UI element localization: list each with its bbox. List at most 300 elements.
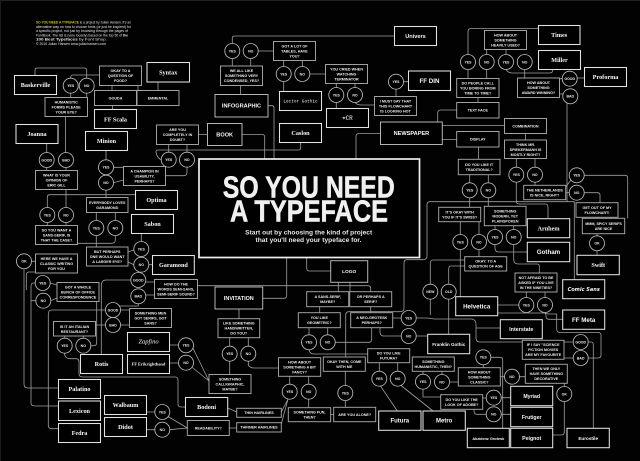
- decision circles: YES: [333, 93, 340, 97]
- typeface: Garamond: Garamond: [159, 262, 188, 269]
- question: spicy serifs: MMM, SPICY SERIFS: [585, 222, 622, 226]
- question: think mr spiekermann: SPIEKERMANN IS: [510, 148, 542, 152]
- decision circles: YES: [376, 377, 383, 381]
- typeface: FF DIN: [408, 71, 450, 90]
- typeface: Proforma: [584, 68, 626, 86]
- question: get out of my flowchart: FLOWCHART!: [584, 211, 610, 215]
- question: a question of age: OKAY: TO A: [475, 260, 496, 264]
- decision circles: NO: [395, 377, 401, 381]
- question: okay to a question of food: OKAY TO A: [111, 69, 131, 73]
- question: spicy serifs: ARE NICE: [595, 227, 613, 231]
- typeface: Palatino: [58, 380, 100, 398]
- typeface: FF Meta: FF Meta: [572, 317, 596, 324]
- decision circles: NO: [522, 60, 528, 64]
- option: thinner hairlines: [237, 423, 281, 432]
- question: go people call you boring: TIME TO TIME?: [464, 91, 492, 95]
- question: a bit fancy: [278, 358, 321, 376]
- question: decorative: THEN WE ONLY: [532, 367, 561, 371]
- category: logo: LOGO: [342, 269, 357, 275]
- main heading: SO YOU NEED: [223, 171, 395, 204]
- question: we all like condensed: SOMETHING VERY: [225, 74, 259, 78]
- decision circles: YES: [159, 410, 166, 414]
- subtitle second line: that you'll need your typeface for.: [256, 237, 362, 244]
- typeface: Univers: [394, 26, 436, 46]
- decision circles: YES: [573, 174, 581, 178]
- question: okay then come with me: WITH ME: [336, 365, 353, 369]
- category: newspaper: [380, 122, 442, 144]
- question: humanistic forms: YOUR EYE?: [56, 110, 78, 114]
- question: a question of age: [465, 257, 507, 271]
- typeface: Fedra: [58, 424, 100, 442]
- question: office correspondence: CORRESPONDENCE: [60, 295, 97, 299]
- question: not afraid: NOT AFRAID TO BE: [519, 276, 554, 280]
- typeface: Joanna: Joanna: [27, 131, 47, 138]
- category: infographic: [215, 94, 268, 117]
- typeface: Metro: [423, 411, 465, 430]
- question: neo-grotesk: PERHAPS?: [362, 321, 382, 325]
- decision circles: GOOD: [575, 340, 587, 344]
- typeface: Optima: [136, 190, 178, 210]
- typeface: Times: [538, 26, 580, 44]
- typeface: Interstate: Interstate: [509, 327, 533, 333]
- question: not afraid: IN THE NINETIES?: [520, 286, 553, 290]
- decision circles: YES: [44, 213, 51, 217]
- typeface: Metro: Metro: [436, 419, 453, 425]
- option: gouda: GOUDA: [109, 96, 123, 100]
- typeface: Myriad: Myriad: [523, 394, 540, 400]
- typeface: Optima: Optima: [146, 197, 167, 204]
- question: okay to a question of food: QUESTION OF: [108, 74, 134, 78]
- typeface: Sabon: Sabon: [144, 221, 161, 228]
- decision circles: NO: [160, 428, 165, 432]
- typeface: FF DIN: FF DIN: [420, 78, 440, 85]
- question: adobe: LOOK OF ADOBE?: [445, 403, 479, 407]
- question: handwritten: DO YOU?: [230, 332, 248, 336]
- typeface: Comic Sans: Comic Sans: [568, 287, 600, 293]
- question: go people call you boring: [457, 78, 499, 98]
- option: or perhaps a serif: OR PERHAPS A: [357, 295, 385, 299]
- question: a bit fancy: FANCY?: [292, 370, 308, 374]
- question: think mr spiekermann: MOSTLY RIGHT?: [511, 153, 541, 157]
- decision circles: NO: [486, 189, 491, 193]
- question: men got serifs: SANS?: [144, 321, 157, 325]
- question: neo-grotesk: [351, 313, 393, 328]
- typeface: Eurostile: [567, 428, 609, 448]
- decision circles: YES: [490, 396, 498, 400]
- option: display: [457, 132, 499, 147]
- decision circles: NO: [81, 344, 86, 348]
- question: office correspondence: BUNCH OF OFFICE: [61, 290, 96, 294]
- option: combination: COMBINATION: [512, 124, 539, 128]
- decision circles: YES: [305, 341, 313, 345]
- question: larger eye: ONE WOULD WANT: [90, 255, 125, 259]
- category: newspaper: NEWSPAPER: [394, 131, 429, 137]
- question: you cried terminator: [326, 64, 368, 84]
- decision circles: GOOD: [41, 158, 53, 162]
- question: netherlands: [524, 185, 566, 200]
- question: something classic: SOMETHING: [468, 375, 491, 379]
- typeface: OCR: ⌖CR: [342, 115, 353, 122]
- question: traditional: [458, 159, 500, 175]
- decision circles: NO: [542, 303, 548, 307]
- decision circles: BAD: [567, 95, 575, 99]
- decision circles: OK: [21, 260, 27, 264]
- question: office correspondence: GOT A WHOLE: [65, 285, 92, 289]
- decision circles: BAD: [62, 158, 70, 162]
- question: science fiction: FICTION MOVIES: [528, 348, 559, 352]
- typeface: FF Scala: [94, 110, 136, 128]
- question: humanistic forms: [45, 98, 88, 116]
- decision circles: BAD: [577, 356, 585, 360]
- typeface: FF Erikrighthand: FF Erikrighthand: [132, 362, 166, 366]
- question: do you like futura: [368, 349, 410, 363]
- question: heavily used: [484, 30, 526, 50]
- question: go people call you boring: DO PEOPLE CALL: [462, 81, 495, 85]
- typeface: Zapfino: Zapfino: [138, 338, 159, 346]
- typeface: Miller: Miller: [551, 57, 568, 64]
- question: decorative: [525, 364, 567, 383]
- typeface: Interstate: [500, 320, 542, 339]
- question: award winning: [518, 78, 560, 98]
- typeface: Rotis: [80, 354, 122, 374]
- question: calligraphic: MAYBE?: [222, 387, 238, 391]
- typeface: Caslon: [280, 124, 322, 142]
- decision circles: GOOD: [564, 77, 576, 81]
- question: go people call you boring: YOU BORING FROM: [460, 86, 496, 90]
- question: okay to a question of food: [100, 66, 142, 86]
- question: something fun: [288, 408, 331, 422]
- decision circles: YES: [67, 84, 75, 88]
- decision circles: YES: [466, 189, 474, 193]
- typeface: Bodoni: Bodoni: [197, 404, 216, 411]
- decision circles: YES: [39, 281, 47, 285]
- question: modern plainspoken: MODERN, YET: [492, 214, 519, 218]
- subtitle: Start out by choosing the kind of project: [245, 230, 373, 237]
- question: do you like futura: FUTURA?: [380, 357, 398, 361]
- typeface: FF Erikrighthand: [128, 354, 170, 374]
- typeface: Futura: Futura: [390, 419, 410, 425]
- question: traditional: TRADITIONAL?: [466, 168, 494, 172]
- question: okay with swiss: YOU IF IT'S SWISS?: [442, 215, 478, 219]
- question: something humanistic: HUMANISTIC, THEN?: [415, 365, 453, 369]
- decision circles: YES: [182, 344, 190, 348]
- category: logo: [331, 261, 368, 282]
- typeface: Bodoni: [186, 398, 228, 416]
- typeface: Helvetica: Helvetica: [463, 303, 491, 310]
- decision circles: NO: [491, 413, 497, 417]
- decision circles: YES: [392, 80, 400, 84]
- typeface: Akzidenz Grotesk: [467, 428, 509, 448]
- decision circles: NO: [41, 299, 46, 303]
- decision circles: YES: [286, 390, 294, 394]
- question: handwritten: LIKE SOMETHING: [223, 322, 255, 326]
- typeface: Frutiger: Frutiger: [522, 415, 542, 421]
- question: italian restaurant: IS IT AN ITALIAN: [60, 325, 89, 329]
- decision circles: NO: [103, 181, 109, 185]
- question: award winning: SOMETHING: [527, 86, 550, 90]
- question: okay with swiss: [439, 207, 481, 222]
- typeface: Caslon: Caslon: [291, 130, 310, 137]
- category: book: BOOK: [216, 132, 233, 138]
- question: netherlands: IS NICE, RIGHT?: [530, 193, 560, 197]
- decision circles: NEW: [426, 290, 435, 294]
- typeface: Arnhem: Arnhem: [538, 226, 560, 232]
- decision circles: YES: [93, 226, 100, 230]
- decision circles: NO: [300, 72, 305, 76]
- decision circles: NO: [532, 173, 538, 177]
- question: geometric: YOU LIKE: [311, 316, 329, 320]
- question: italian restaurant: [54, 322, 96, 336]
- question: larger eye: A LARGER EYE?: [92, 260, 123, 264]
- typeface: Zapfino: [128, 332, 170, 352]
- typeface: Garamond: [152, 256, 194, 274]
- typeface: Didot: Didot: [118, 424, 134, 431]
- question: humanistic forms: HUMANISTIC: [55, 100, 78, 104]
- question: something classic: CLASSIC?: [470, 380, 489, 384]
- typeface: FF Scala: FF Scala: [104, 116, 127, 123]
- question: handwritten: HANDWRITTEN,: [225, 327, 253, 331]
- decision circles: NO: [306, 390, 312, 394]
- question: i must say: I MUST SAY THAT: [380, 99, 412, 103]
- question: okay to a question of food: FOOD?: [114, 79, 128, 83]
- typeface: Minion: Minion: [97, 138, 117, 145]
- decision circles: NO: [325, 341, 331, 345]
- decision circles: NO: [511, 235, 517, 239]
- typeface: FF Meta: [563, 310, 605, 329]
- question: semi-sans: WORDS SEMI-SANS,: [158, 287, 194, 291]
- decision circles: NO: [183, 361, 189, 365]
- typeface: Comic Sans: [563, 280, 605, 299]
- decision circles: NO: [184, 158, 190, 162]
- question: think mr spiekermann: THINK MR.: [516, 143, 535, 147]
- question: something classic: HOW ABOUT: [468, 370, 492, 374]
- question: decorative: DECORATIVE: [534, 377, 559, 381]
- question: modern plainspoken: [484, 206, 526, 226]
- typeface: Lector Gothic: Lector Gothic: [283, 100, 318, 104]
- decision circles: NO: [439, 380, 445, 384]
- question: sans-serif: SO YOU WANT A: [42, 228, 72, 232]
- option: thinner hairlines: THINNER HAIRLINES: [240, 426, 278, 430]
- question: something humanistic: [412, 357, 454, 371]
- typeface: Didot: [104, 418, 146, 436]
- question: got a lot of tables: [274, 42, 316, 60]
- option: a sans-serif: MAYBE?: [320, 300, 336, 304]
- question: adobe: DO YOU LIKE THE: [446, 398, 478, 402]
- decision circles: NO: [509, 375, 515, 379]
- decision circles: OK: [562, 392, 567, 396]
- question: are you completely in doubt: COMPLETELY IN: [163, 133, 193, 137]
- question: classic writing: FOR YOU: [48, 267, 65, 271]
- decision circles: GOOD: [108, 308, 119, 312]
- typeface: Myriad: [511, 386, 553, 406]
- intro text: 100 Best Typefaces by Font Shop.: [36, 38, 107, 42]
- question: what is your opinion of eric gill: OPINION OF: [46, 178, 68, 182]
- question: men got serifs: SOMETHING MEN: [135, 311, 167, 315]
- question: got a lot of tables: GOT A LOT OF: [282, 44, 308, 48]
- typeface: Peignot: [511, 428, 553, 448]
- question: not afraid: [515, 273, 557, 292]
- question: spicy serifs: [582, 218, 625, 234]
- question: we all like condensed: CONDENSED, YES?: [224, 79, 260, 83]
- title panel: [199, 159, 420, 258]
- typeface: Proforma: Proforma: [593, 74, 618, 81]
- option: text face: TEXT FACE: [468, 109, 488, 113]
- question: you cried terminator: YOU CRIED WHEN: [330, 67, 363, 71]
- typeface: Frutiger: [511, 407, 553, 427]
- typeface: Gotham: Gotham: [537, 249, 561, 256]
- question: i must say: [374, 96, 416, 116]
- question: got a lot of tables: TABLES, HAVE: [281, 49, 308, 53]
- option: text face: [457, 102, 499, 118]
- decision circles: GOOD: [133, 278, 144, 282]
- decision circles: YES: [464, 60, 472, 64]
- question: a question of age: QUESTION OF AGE: [469, 265, 503, 269]
- option: thin hairlines: [237, 408, 281, 417]
- question: semi-sans: HOW DO THE: [164, 282, 189, 286]
- category: invitation: [215, 287, 263, 309]
- typeface: Franklin Gothic: Franklin Gothic: [432, 342, 466, 347]
- question: geometric: GEOMETRIC?: [307, 321, 332, 325]
- question: humanistic forms: FORMS PLEASE: [52, 105, 81, 109]
- typeface: Fedra: Fedra: [72, 430, 87, 437]
- question: neo-grotesk: A NEO-GROTESK: [356, 316, 388, 320]
- question: something classic: [458, 368, 500, 386]
- option: gouda: [94, 90, 136, 106]
- question: heavily used: HOW ABOUT: [494, 33, 518, 37]
- question: everybody loves garamond: GARAMOND: [96, 206, 119, 210]
- decision circles: NO: [63, 213, 69, 217]
- decision circles: NO: [139, 263, 144, 267]
- question: a bit fancy: SOMETHING A BIT: [283, 366, 317, 370]
- question: something humanistic: SOMETHING: [422, 360, 445, 364]
- question: something fun: SOMETHING FUN,: [294, 411, 325, 415]
- question: get out of my flowchart: GET OUT OF MY: [582, 206, 612, 210]
- typeface: Minion: [86, 132, 128, 150]
- intro text: FontBook. The list is (very loosely) based on the top 50 of the: [36, 33, 128, 37]
- question: we all like condensed: WE ALL LIKE: [230, 69, 254, 73]
- typeface: Walbaum: [104, 396, 146, 414]
- decision circles: YES: [405, 316, 413, 320]
- decision circles: NO: [352, 93, 358, 97]
- main heading second line: A TYPEFACE: [230, 196, 388, 229]
- decision circles: YES: [280, 72, 288, 76]
- question: champion in usability: [124, 166, 166, 186]
- question: sans-serif: SANS-SERIF, IS: [43, 233, 71, 237]
- question: okay with swiss: IT'S OKAY WITH: [446, 210, 474, 214]
- decision circles: BAD: [109, 323, 117, 327]
- intro text: alternative way on how to choose fonts (or just be inspired) for: [36, 25, 132, 29]
- question: traditional: DO YOU LIKE IT: [465, 163, 494, 167]
- question: are you alone: ARE YOU ALONE?: [338, 413, 372, 417]
- option: or perhaps a serif: [350, 292, 392, 307]
- question: got a lot of tables: YOU?: [289, 54, 300, 58]
- question: classic writing: CLASSIC WRITING: [40, 262, 73, 266]
- decision circles: YES: [61, 344, 69, 348]
- decision circles: NO: [476, 240, 482, 244]
- question: classic writing: [36, 254, 78, 273]
- typeface: Gotham: [527, 242, 570, 262]
- question: champion in usability: USABILITY,: [134, 174, 155, 178]
- category: invitation: INVITATION: [224, 296, 254, 302]
- question: we all like condensed: [220, 66, 262, 86]
- option: a sans-serif: A SANS-SERIF,: [314, 295, 341, 299]
- question: semi-sans: [154, 280, 198, 298]
- decision circles: NO: [406, 334, 412, 338]
- question: calligraphic: SOMETHING: [219, 377, 241, 381]
- typeface: Akzidenz Grotesk: Akzidenz Grotesk: [472, 437, 505, 441]
- intro text: © 2010 Julian Hansen www.julianhansen.com: [36, 42, 106, 46]
- question: decorative: HAVE SOMETHING: [530, 372, 563, 376]
- question: okay then come with me: OKAY THEN, COME: [327, 360, 362, 364]
- intro text: [36, 21, 132, 46]
- question: netherlands: THE NETHERLANDS: [527, 188, 563, 192]
- typeface: Univers: Univers: [405, 34, 426, 40]
- question: are you completely in doubt: DOUBT?: [170, 138, 186, 142]
- question: i must say: IS LOOKING HOT: [380, 109, 412, 113]
- question: i must say: THIS FLOWCHART: [379, 104, 413, 108]
- question: something fun: THEN?: [303, 416, 316, 420]
- decision circles: OK: [594, 242, 600, 246]
- typeface: Helvetica: [456, 297, 498, 316]
- decision circles: YES: [513, 173, 520, 177]
- question: geometric: [298, 313, 340, 328]
- decision circles: NO: [574, 191, 580, 195]
- decision circles: YES: [165, 158, 173, 162]
- typeface: Lexicon: [58, 401, 100, 420]
- question: champion in usability: PERHAPS?: [134, 179, 155, 183]
- decision circles: OLD: [445, 290, 453, 294]
- decision circles: YES: [457, 240, 464, 244]
- question: what is your opinion of eric gill: WHAT IS YOUR: [43, 173, 70, 177]
- question: modern plainspoken: PLAINSPOKEN: [492, 219, 519, 223]
- question: readability: [187, 420, 229, 436]
- typeface: OCR: [326, 108, 368, 128]
- question: calligraphic: [209, 374, 251, 394]
- typeface: Sabon: [132, 214, 174, 234]
- decision circles: YES: [502, 60, 510, 64]
- question: adobe: [441, 395, 483, 409]
- question: you cried terminator: WATCHING: [337, 72, 357, 76]
- question: handwritten: [218, 319, 260, 338]
- question: a bit fancy: HOW ABOUT: [288, 360, 312, 364]
- decision circles: YES: [342, 391, 349, 395]
- typeface: Lexicon: Lexicon: [69, 408, 91, 415]
- typeface: Swift: [577, 255, 619, 275]
- question: everybody loves garamond: [86, 198, 128, 212]
- question: what is your opinion of eric gill: ERIC GILL: [47, 183, 66, 187]
- decision circles: YES: [419, 380, 427, 384]
- question: italian restaurant: RESTAURANT?: [61, 330, 89, 334]
- decision circles: NO: [84, 84, 90, 88]
- typeface: Peignot: Peignot: [522, 436, 541, 442]
- question: classic writing: HERE WE HAVE A: [41, 257, 73, 261]
- question: science fiction: IF I SAY "SCIENCE: [527, 343, 560, 347]
- question: calligraphic: CALLIGRAPHIC,: [216, 382, 244, 386]
- question: not afraid: ASKED IF YOU LIVE: [518, 281, 554, 285]
- question: champion in usability: A CHAMPION IN: [130, 169, 159, 173]
- decision circles: YES: [138, 247, 145, 251]
- option: emmental: EMMENTAL: [148, 96, 169, 100]
- option: thin hairlines: THIN HAIRLINES: [244, 411, 274, 415]
- question: larger eye: [86, 247, 128, 266]
- question: modern plainspoken: SOMETHING: [494, 209, 516, 213]
- question: science fiction: [522, 340, 564, 359]
- decision circles: [16, 44, 604, 437]
- option: or perhaps a serif: SERIF?: [364, 300, 378, 304]
- question: readability: READABILITY?: [195, 426, 223, 430]
- category: infographic: INFOGRAPHIC: [222, 104, 261, 110]
- typeface: Baskerville: [14, 76, 56, 94]
